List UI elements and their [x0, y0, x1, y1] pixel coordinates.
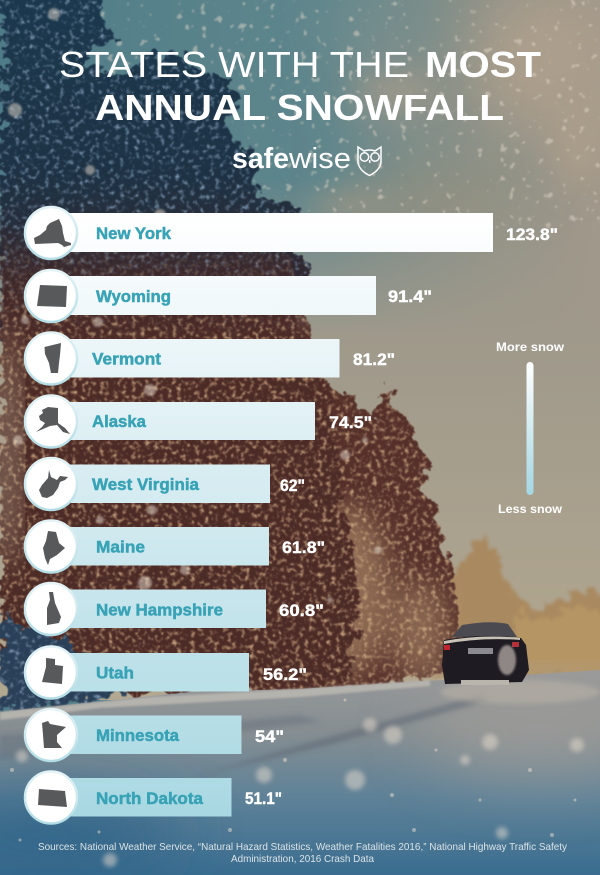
row: Wyoming: Wyoming — [96, 287, 171, 306]
legend: more snow to less snow: More snow — [496, 340, 565, 354]
title: ANNUAL SNOWFALL — [95, 87, 504, 128]
sources note: Administration, 2016 Crash Data — [231, 854, 374, 865]
row: Vermont: 81.2" — [353, 350, 395, 369]
row: West Virginia: 62" — [280, 476, 305, 495]
middle brown trees — [250, 382, 462, 700]
safewise logo: wise — [288, 143, 351, 175]
row: Wyoming — [25, 270, 432, 322]
sources note — [38, 842, 568, 865]
sources note: Sources: National Weather Service, “Natural Hazard Statistics, Weather Fatalities 2016,” National Highway Traffic Safety — [38, 842, 568, 853]
legend: more snow to less snow — [496, 340, 565, 516]
row: Minnesota — [25, 709, 284, 761]
row: Alaska: 74.5" — [329, 413, 372, 432]
row: New York: New York — [96, 224, 172, 243]
row: Vermont — [25, 332, 395, 384]
main foreground trees — [0, 0, 312, 340]
legend: more snow to less snow: Less snow — [498, 502, 563, 516]
title: MOST — [425, 44, 541, 85]
row: Alaska: Alaska — [92, 412, 147, 431]
row: Maine — [25, 520, 325, 572]
row: Wyoming: 91.4" — [388, 287, 432, 306]
row: Utah: 56.2" — [263, 665, 307, 684]
row: New Hampshire — [25, 583, 324, 635]
row: Minnesota: 54" — [255, 727, 284, 746]
row: West Virginia — [25, 458, 305, 510]
row: Utah — [25, 646, 307, 698]
row: New York: 123.8" — [506, 225, 558, 244]
row: North Dakota: 51.1" — [245, 789, 282, 808]
row: North Dakota — [25, 772, 282, 824]
icon: owl — [358, 147, 381, 176]
row: New Hampshire: 60.8" — [279, 601, 324, 620]
row: Vermont: Vermont — [92, 350, 161, 368]
row: Maine: 61.8" — [282, 538, 325, 557]
row: New Hampshire: New Hampshire — [96, 600, 223, 620]
row: West Virginia: West Virginia — [92, 475, 200, 494]
title: STATES WITH THE — [59, 44, 409, 85]
far orange trees — [435, 535, 600, 680]
bar chart: annual snowfall by state — [25, 207, 558, 824]
row: Alaska — [25, 396, 372, 448]
title — [59, 44, 541, 128]
safewise logo — [232, 143, 381, 176]
row: Utah: Utah — [96, 664, 134, 682]
road — [0, 670, 600, 875]
row: New York — [25, 207, 558, 259]
safewise logo: safe — [232, 143, 289, 175]
row: North Dakota: North Dakota — [96, 789, 204, 808]
sky flakes — [100, 0, 600, 230]
car — [442, 622, 529, 685]
row: Maine: Maine — [96, 538, 145, 556]
row: Minnesota: Minnesota — [96, 726, 180, 745]
